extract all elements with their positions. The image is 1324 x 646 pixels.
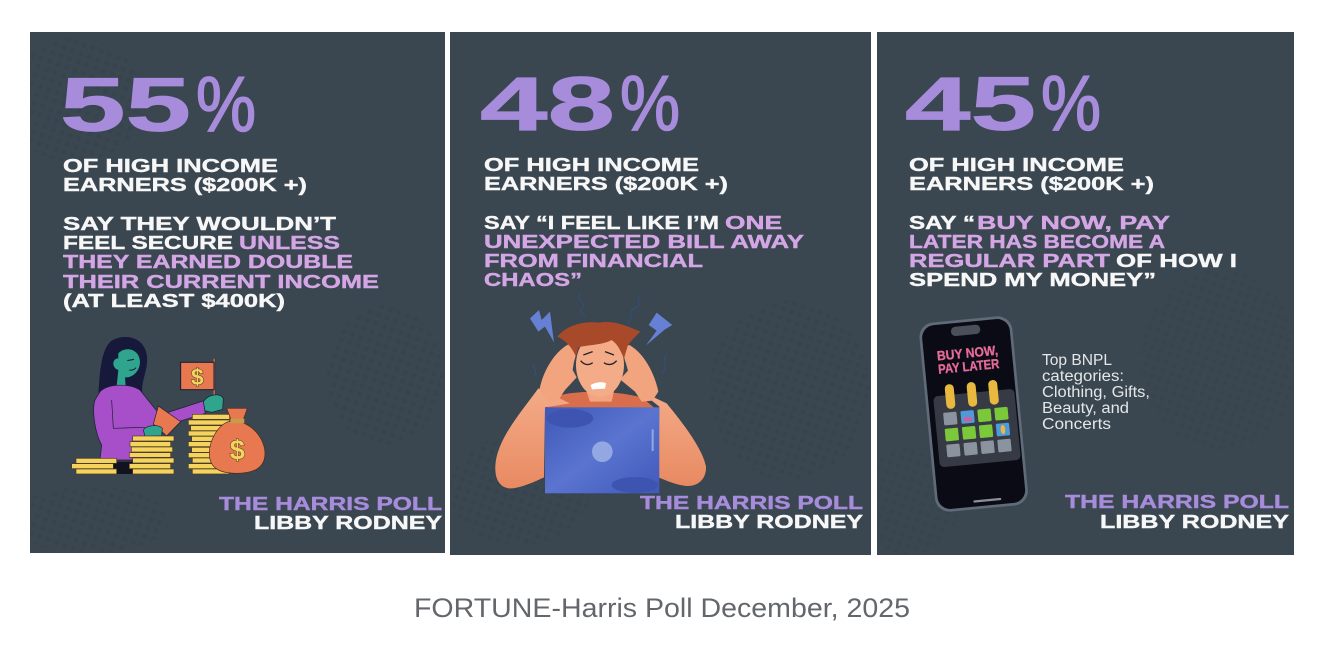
text block: finding: UNLESS — [239, 232, 340, 253]
text block: top BNPL categories: Clothing, Gifts, — [1042, 384, 1150, 401]
text block: finding: THEIR CURRENT INCOME — [63, 271, 379, 292]
panel background — [450, 32, 871, 555]
source: The Harris Poll, Libby Rodney: LIBBY RODNEY — [675, 511, 864, 532]
statistic: 45% — [905, 59, 1101, 147]
text block: audience — [909, 154, 1154, 194]
text block: finding: ONE — [725, 212, 782, 233]
illustration: phone with buy now pay later calendar: PAY LATER — [938, 356, 1000, 377]
text block: audience: OF HIGH INCOME — [909, 154, 1124, 175]
text block: audience: EARNERS ($200K +) — [63, 174, 307, 195]
text block: audience — [63, 155, 307, 195]
text block: audience: EARNERS ($200K +) — [909, 173, 1154, 194]
statistic: 48%: % — [620, 59, 680, 147]
panel background — [877, 32, 1294, 555]
source: The Harris Poll, Libby Rodney — [219, 493, 443, 533]
statistic: 48% — [480, 59, 680, 147]
text block: finding: SAY THEY WOULDN’T — [63, 213, 337, 234]
text block: finding: SPEND MY MONEY” — [909, 269, 1156, 290]
text block: finding: UNEXPECTED BILL AWAY — [484, 231, 805, 252]
illustration: phone with buy now pay later calendar: BUY NOW, — [936, 343, 999, 364]
caption: FORTUNE-Harris Poll December, 2025 — [414, 593, 910, 623]
illustration: stressed man at laptop — [495, 293, 706, 493]
text block: finding: SAY “ — [909, 212, 975, 233]
text block: finding: FEEL SECURE — [63, 232, 233, 253]
statistic: 55%: 55 — [60, 63, 191, 148]
text block: finding: BUY NOW, PAY — [977, 212, 1171, 233]
panel: 48 percent — [450, 32, 871, 555]
text block: top BNPL categories: Top BNPL — [1042, 352, 1112, 369]
source: The Harris Poll, Libby Rodney — [1065, 491, 1290, 532]
statistic: 55% — [60, 60, 256, 148]
illustration: woman with coins and money bag: $ — [230, 434, 245, 465]
source: The Harris Poll, Libby Rodney — [640, 492, 864, 532]
illustration: woman with coins and money bag — [72, 337, 265, 474]
statistic: 55%: % — [196, 60, 256, 148]
text block: top BNPL categories: Concerts — [1042, 416, 1111, 433]
source: The Harris Poll, Libby Rodney: LIBBY RODNEY — [254, 512, 443, 533]
text block: finding: SAY “I FEEL LIKE I’M — [484, 212, 719, 233]
text block: finding: FROM FINANCIAL — [484, 250, 703, 271]
illustration: woman with coins and money bag: $ — [191, 364, 204, 390]
text block: finding: REGULAR PART — [909, 250, 1111, 271]
panel: 45 percent — [860, 32, 1300, 555]
text block: top BNPL categories: Beauty, and — [1042, 400, 1129, 417]
text block: audience — [484, 154, 728, 194]
illustration: phone with buy now pay later calendar — [918, 315, 1029, 513]
text block: finding: OF HOW I — [1116, 250, 1237, 271]
text block: finding: (AT LEAST $400K) — [63, 290, 285, 311]
text block: audience: EARNERS ($200K +) — [484, 173, 728, 194]
text block: top BNPL categories — [1042, 352, 1150, 433]
text block: finding: LATER HAS BECOME A — [909, 231, 1165, 252]
text block: finding: CHAOS” — [484, 269, 582, 290]
source: The Harris Poll, Libby Rodney: THE HARRIS POLL — [640, 492, 863, 513]
text block: finding — [484, 212, 805, 290]
text block: top BNPL categories: categories: — [1042, 368, 1124, 385]
text block: finding: THEY EARNED DOUBLE — [63, 251, 353, 272]
statistic: 45%: % — [1041, 59, 1101, 147]
text block: finding — [909, 212, 1237, 290]
text block: audience: OF HIGH INCOME — [484, 154, 699, 175]
statistic: 48%: 48 — [480, 62, 615, 147]
text block: finding — [63, 213, 379, 311]
statistic: 45%: 45 — [905, 62, 1036, 147]
source: The Harris Poll, Libby Rodney: THE HARRIS POLL — [219, 493, 442, 514]
source: The Harris Poll, Libby Rodney: LIBBY RODNEY — [1100, 511, 1290, 532]
source: The Harris Poll, Libby Rodney: THE HARRIS POLL — [1065, 491, 1289, 512]
panel background — [30, 32, 445, 553]
text block: audience: OF HIGH INCOME — [63, 155, 278, 176]
panel: 55 percent — [5, 32, 445, 553]
